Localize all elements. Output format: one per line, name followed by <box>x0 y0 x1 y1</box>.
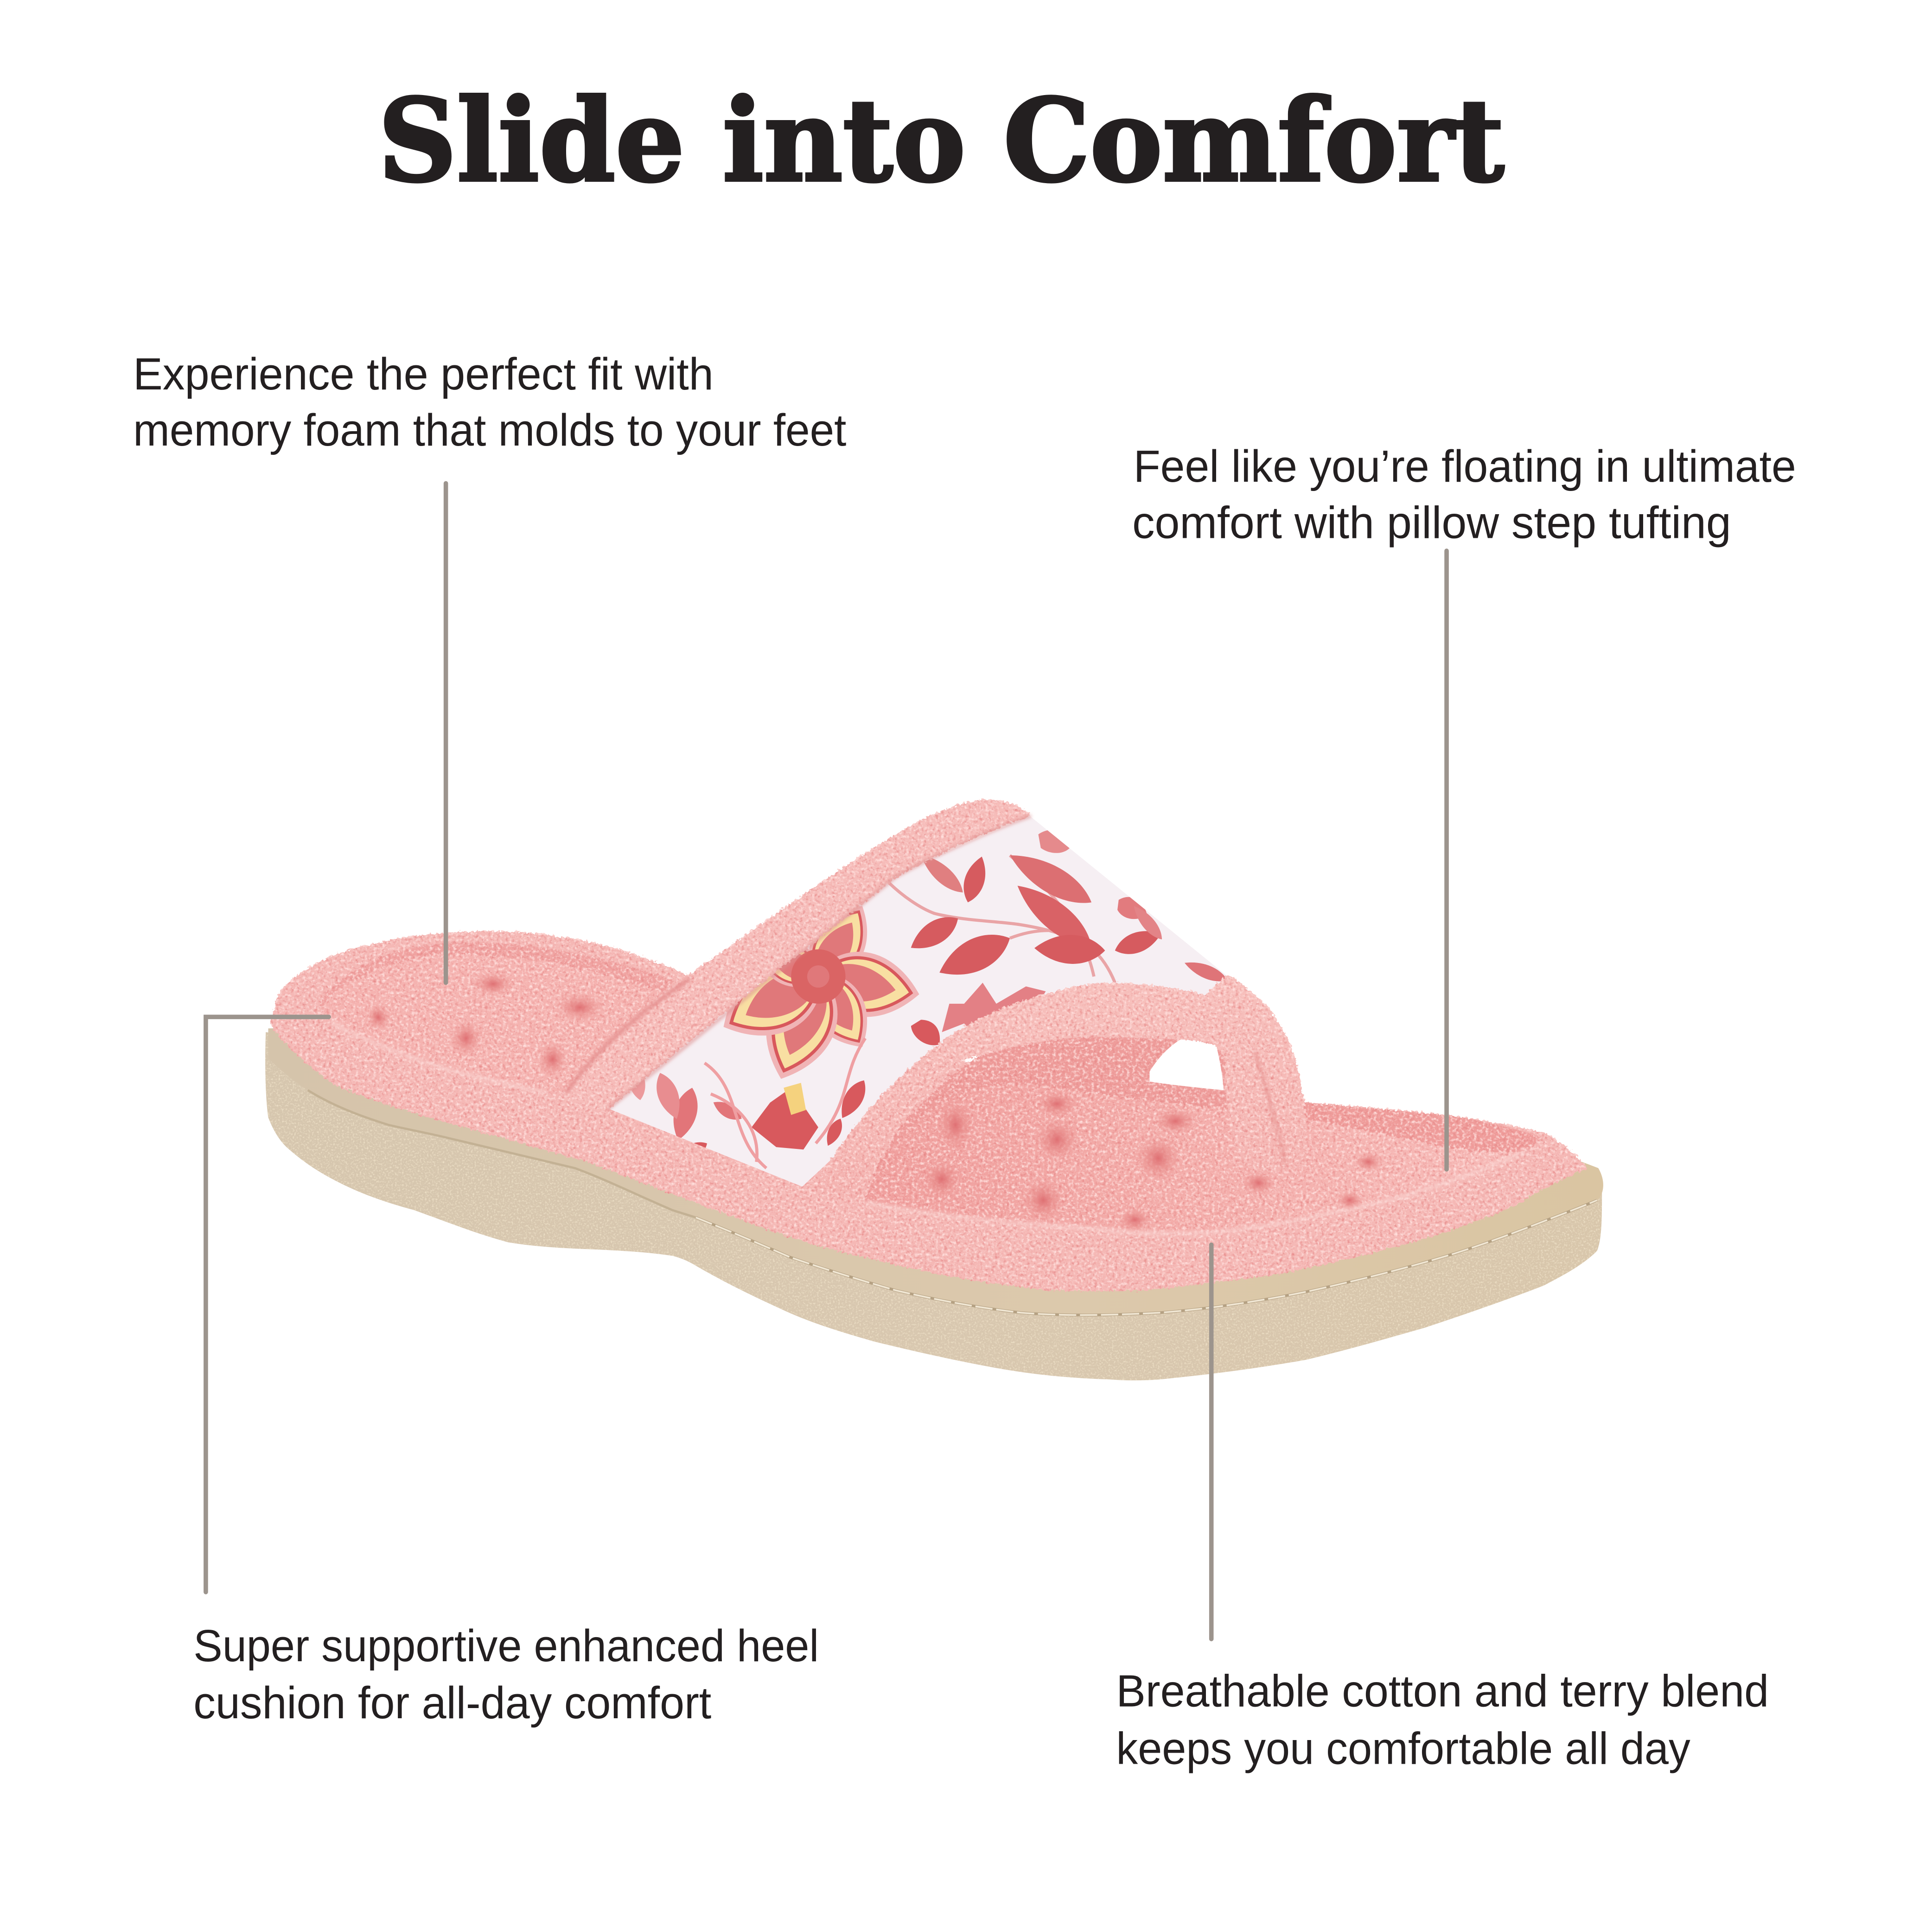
terry strap assembly <box>559 800 1308 1201</box>
front insole <box>865 1084 1529 1233</box>
sole <box>265 1032 1602 1380</box>
tufting dimples <box>366 971 1383 1232</box>
terry rim <box>271 931 1587 1291</box>
welt band <box>268 1026 1603 1315</box>
callout: memory foam: memory foam that molds to your feet <box>133 404 846 455</box>
small flowers and lower sprays <box>626 982 1046 1169</box>
floral upper panel <box>593 810 1242 1193</box>
leader line: heel cushion <box>206 1017 329 1592</box>
slipper illustration <box>265 800 1603 1380</box>
callout: heel cushion <box>193 1620 819 1728</box>
leaves and stems <box>887 830 1230 987</box>
welt stitching <box>308 1090 1597 1315</box>
callout: memory foam: Experience the perfect fit with <box>133 348 714 399</box>
toe opening <box>1149 1039 1224 1090</box>
callout: pillow step tufting <box>1132 440 1796 548</box>
panel fabric <box>593 810 1242 1193</box>
title: Slide into Comfort <box>378 74 1505 207</box>
callout: pillow step tufting: comfort with pillow step tufting <box>1132 497 1731 548</box>
leader line: memory foam <box>445 483 446 982</box>
callout: heel cushion: cushion for all-day comfort <box>193 1677 711 1728</box>
strap centre seam <box>1255 1051 1286 1164</box>
callout: heel cushion: Super supportive enhanced heel <box>193 1620 819 1671</box>
strap back wall <box>861 1020 1240 1199</box>
leader line: pillow step <box>1446 551 1447 1169</box>
upper binding band <box>559 800 1031 1110</box>
callout: breathable blend: Breathable cotton and terry blend <box>1116 1665 1769 1716</box>
thong strap and toe post <box>816 974 1308 1201</box>
heel insole <box>321 953 674 1093</box>
callout: breathable blend <box>1116 1665 1769 1773</box>
heel far rim <box>319 942 674 1014</box>
callout: memory foam <box>133 348 846 455</box>
callout: pillow step tufting: Feel like you’re floating in ultimate <box>1134 440 1796 491</box>
large flower <box>723 906 919 1079</box>
callout: breathable blend: keeps you comfortable all day <box>1116 1722 1690 1773</box>
rim lip highlights <box>330 1021 1529 1233</box>
leader line: terry blend <box>1211 1245 1212 1639</box>
far toe rim <box>1090 1083 1540 1152</box>
terry rim and insoles <box>271 931 1587 1291</box>
band shadow lines <box>566 816 1031 1109</box>
